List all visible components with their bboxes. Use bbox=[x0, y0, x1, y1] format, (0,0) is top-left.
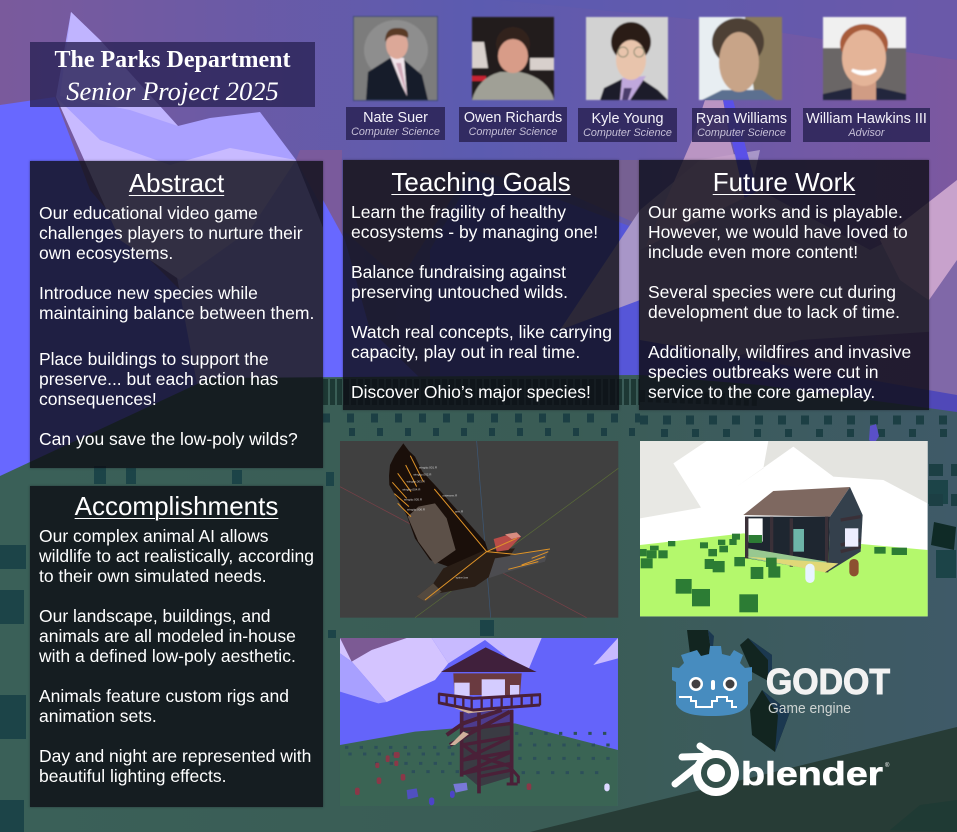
logo: Godot game engine bbox=[672, 646, 890, 717]
portrait: Nate Suer bbox=[353, 16, 438, 101]
text: goals paragraph 4: Discover Ohio’s major species! bbox=[351, 382, 591, 402]
panel: Future Work bbox=[639, 160, 929, 410]
text: future paragraph 2: Several species were cut during bbox=[648, 282, 896, 302]
portrait: William Hawkins III bbox=[823, 17, 906, 100]
screenshot: fire lookout tower in game bbox=[340, 638, 618, 806]
Godot subtitle: Game engine bbox=[768, 700, 851, 717]
text: future paragraph 3 bbox=[648, 342, 911, 402]
name tag: Kyle Young: Computer Science bbox=[583, 127, 672, 139]
team portraits bbox=[352, 16, 907, 102]
screenshot: eagle rig in Blender: spine.low bbox=[456, 575, 469, 579]
screenshot: eagle rig in Blender: wingtip.004.R bbox=[402, 487, 421, 491]
text: accomplishments paragraph 2: with a defined low-poly aesthetic. bbox=[39, 646, 296, 666]
text: accomplishments paragraph 2: Our landscape, buildings, and bbox=[39, 606, 271, 626]
text: goals paragraph 1: Learn the fragility of healthy bbox=[351, 202, 566, 222]
text: abstract paragraph 1: Our educational video game bbox=[39, 203, 258, 223]
text: abstract paragraph 3: consequences! bbox=[39, 389, 157, 409]
text: accomplishments paragraph 4: beautiful lighting effects. bbox=[39, 766, 226, 786]
text: accomplishments paragraph 2: animals are all modeled in-house bbox=[39, 626, 296, 646]
text: goals paragraph 3 bbox=[351, 322, 612, 362]
text: goals paragraph 2 bbox=[351, 262, 568, 302]
text: accomplishments paragraph 3 bbox=[39, 686, 289, 726]
text: accomplishments paragraph 1 bbox=[39, 526, 314, 586]
name tag: William Hawkins III: William Hawkins III bbox=[806, 111, 927, 127]
ground cubes bbox=[0, 466, 956, 832]
screenshot: eagle rig in Blender: wingtip.005.R bbox=[404, 497, 423, 501]
portrait: Ryan Williams bbox=[699, 17, 782, 100]
text: future paragraph 3: Additionally, wildfires and invasive bbox=[648, 342, 911, 362]
heading: Future Work: Future Work bbox=[713, 167, 855, 197]
text: accomplishments paragraph 3: Animals feature custom rigs and bbox=[39, 686, 289, 706]
logo: Blender: ® bbox=[885, 762, 890, 769]
text: accomplishments paragraph 3: animation sets. bbox=[39, 706, 157, 726]
title banner bbox=[30, 42, 315, 107]
name tag: William Hawkins III bbox=[803, 108, 930, 142]
panel: Teaching Goals bbox=[343, 160, 619, 410]
text: abstract paragraph 1 bbox=[39, 203, 303, 263]
name tag: William Hawkins III: Advisor bbox=[848, 127, 884, 139]
text: future paragraph 1: include even more content! bbox=[648, 242, 858, 262]
text: goals paragraph 1: ecosystems - by managing one! bbox=[351, 222, 598, 242]
text: future paragraph 1: However, we would have loved to bbox=[648, 222, 908, 242]
text: future paragraph 1: Our game works and is playable. bbox=[648, 202, 903, 222]
screenshot: eagle rig in Blender: wingtip.003.R bbox=[407, 480, 426, 484]
text: abstract paragraph 2 bbox=[39, 283, 314, 323]
text: abstract paragraph 2: Introduce new species while bbox=[39, 283, 258, 303]
name tag: Ryan Williams bbox=[692, 108, 791, 142]
text: future paragraph 2: development due to lack of time. bbox=[648, 302, 900, 322]
screenshot: eagle rig in Blender bbox=[340, 441, 618, 618]
Blender wordmark: blender bbox=[741, 755, 883, 792]
text: abstract paragraph 1: challenges players to nurture their bbox=[39, 223, 303, 243]
text: accomplishments paragraph 1: to their own simulated needs. bbox=[39, 566, 267, 586]
text: goals paragraph 2: Balance fundraising against bbox=[351, 262, 566, 282]
text: abstract paragraph 1: own ecosystems. bbox=[39, 243, 173, 263]
Godot wordmark: GODOT bbox=[766, 661, 890, 702]
heading: Teaching Goals: Teaching Goals bbox=[391, 167, 571, 197]
text: abstract paragraph 3: preserve... but each action has bbox=[39, 369, 278, 389]
portrait: Owen Richards bbox=[472, 17, 554, 100]
text: goals paragraph 3: Watch real concepts, like carrying bbox=[351, 322, 612, 342]
screenshot: eagle rig in Blender: wingtip.002.R bbox=[413, 473, 432, 477]
screenshot: eagle rig in Blender: wingtip.001.R bbox=[419, 465, 438, 469]
panel: Abstract bbox=[30, 161, 323, 468]
name tag: Ryan Williams: Ryan Williams bbox=[696, 111, 787, 127]
text: future paragraph 3: service to the core gameplay. bbox=[648, 382, 875, 402]
screenshot: eagle rig in Blender: outerarm.R bbox=[442, 493, 458, 497]
subtitle text: Senior Project 2025 bbox=[66, 76, 279, 106]
name tag: Nate Suer bbox=[346, 107, 445, 140]
screenshot: log cabin in game bbox=[640, 441, 928, 616]
name tag: Kyle Young bbox=[578, 108, 677, 142]
text: goals paragraph 1 bbox=[351, 202, 598, 242]
heading: Abstract: Abstract bbox=[129, 168, 224, 198]
text: abstract paragraph 3: Place buildings to support the bbox=[39, 349, 269, 369]
name tag: Owen Richards: Computer Science bbox=[469, 126, 557, 138]
text: accomplishments paragraph 4: Day and night are represented with bbox=[39, 746, 311, 766]
screenshot: eagle rig in Blender: arm.R bbox=[455, 509, 464, 513]
text: abstract paragraph 2: maintaining balance between them. bbox=[39, 303, 314, 323]
text: goals paragraph 3: capacity, play out in real time. bbox=[351, 342, 580, 362]
name tag: Nate Suer: Computer Science bbox=[351, 126, 440, 138]
name tag: Owen Richards: Owen Richards bbox=[464, 110, 562, 126]
text: accomplishments paragraph 2 bbox=[39, 606, 296, 666]
name tag: Kyle Young: Kyle Young bbox=[591, 111, 664, 127]
text: future paragraph 2 bbox=[648, 282, 900, 322]
text: abstract paragraph 4: Can you save the low-poly wilds? bbox=[39, 429, 298, 449]
logo: Blender bbox=[675, 746, 890, 796]
text: accomplishments paragraph 4 bbox=[39, 746, 311, 786]
text: future paragraph 3: species outbreaks were cut in bbox=[648, 362, 879, 382]
text: future paragraph 1 bbox=[648, 202, 908, 262]
text: abstract paragraph 3 bbox=[39, 349, 278, 409]
name tag: Owen Richards bbox=[459, 107, 567, 142]
name tag: Nate Suer: Nate Suer bbox=[363, 110, 428, 126]
heading: Accomplishments: Accomplishments bbox=[75, 491, 278, 521]
title text: The Parks Department bbox=[55, 47, 290, 73]
panel: Accomplishments bbox=[30, 486, 323, 807]
screenshot: eagle rig in Blender: wingtip.006.R bbox=[407, 507, 426, 511]
text: goals paragraph 2: preserving untouched wilds. bbox=[351, 282, 568, 302]
text: accomplishments paragraph 1: Our complex animal AI allows bbox=[39, 526, 269, 546]
text: accomplishments paragraph 1: wildlife to act realistically, according bbox=[39, 546, 314, 566]
portrait: Kyle Young bbox=[586, 17, 668, 100]
name tag: Ryan Williams: Computer Science bbox=[697, 127, 786, 139]
